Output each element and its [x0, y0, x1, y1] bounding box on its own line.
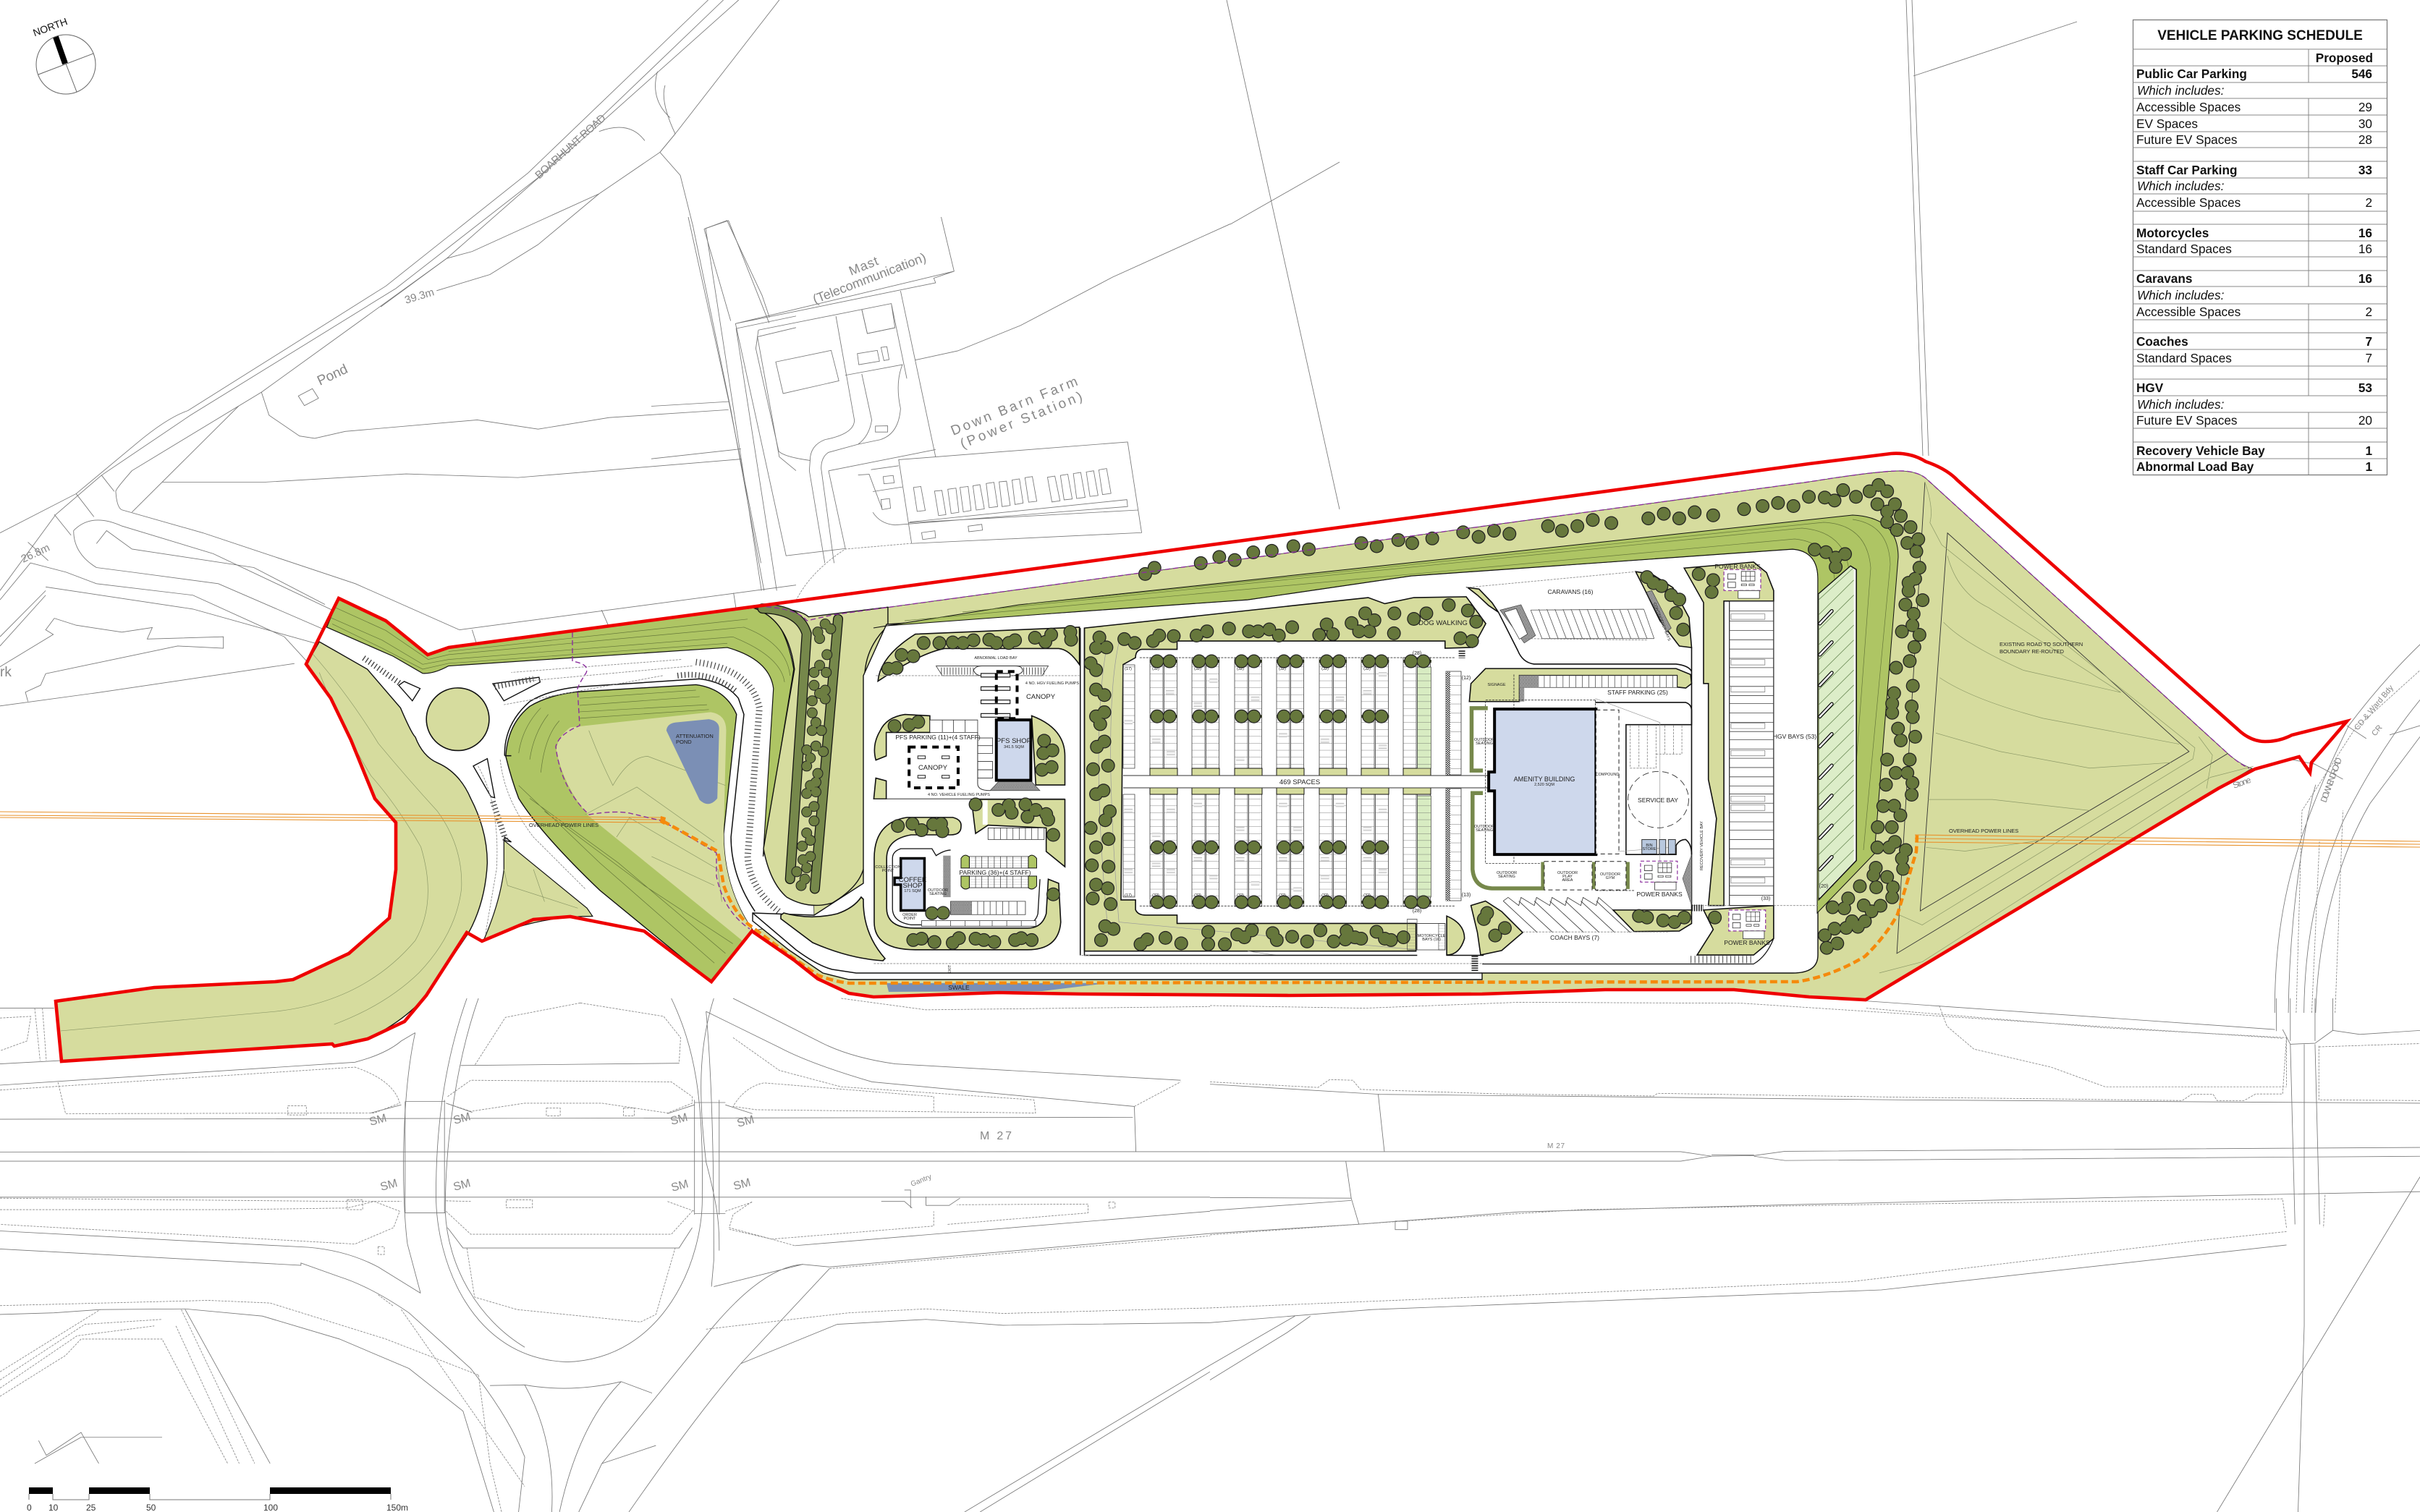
- plan text labels: HGV BAYS (53): [1773, 733, 1816, 740]
- field boundaries north and east: [1227, 0, 2077, 509]
- plan text labels: 4 NO. HGV FUELING PUMPS: [1025, 681, 1079, 686]
- table rows: Future EV Spaces: [2136, 413, 2237, 428]
- pond and power line labels: ATTENUATION: [676, 733, 714, 739]
- staff parking island: [1469, 668, 1691, 702]
- HGV canopy: [997, 671, 1017, 718]
- coffee inner block edge: [892, 849, 1040, 925]
- plan text labels: (32): [1152, 893, 1159, 898]
- plan text labels: (Telecommunication): [811, 250, 928, 307]
- panel: service area hardstanding: [753, 549, 1818, 980]
- M27 motorway and junction west: [0, 998, 1210, 1512]
- south road edge: [753, 913, 1482, 973]
- plan text labels: POINT: [882, 869, 894, 873]
- outdoor hedges: [1471, 708, 1628, 889]
- panel: car parking rows 469 spaces: [1123, 658, 1512, 906]
- plan text labels: RECOVERY VEHICLE BAY: [1700, 821, 1704, 870]
- plan text labels: AREA: [1562, 878, 1573, 883]
- plan text labels: (32): [1279, 893, 1286, 898]
- plan text labels: rk: [0, 665, 12, 680]
- table rows: EV Spaces: [2136, 116, 2198, 131]
- plan text labels: M 27: [1547, 1142, 1565, 1150]
- plan text labels: (32): [1152, 667, 1159, 671]
- island south of lobe: [781, 897, 885, 961]
- trees: north boundary belt: [1145, 497, 1809, 574]
- plan text labels: DOG WALKING: [1418, 619, 1468, 627]
- service bay circle: [1628, 771, 1688, 828]
- south landscape triangle: [483, 841, 593, 940]
- table rows: Abnormal Load Bay: [2136, 459, 2254, 474]
- table rows: Motorcycles: [2136, 226, 2209, 240]
- attenuation zone: [557, 712, 753, 940]
- south hatching: [1691, 956, 1753, 963]
- table rows: Standard Spaces: [2136, 242, 2232, 256]
- plan text labels: (28): [1413, 909, 1421, 914]
- accessible bays: [1446, 671, 1461, 901]
- plan text labels: 4 NO. VEHICLE FUELING PUMPS: [928, 793, 990, 797]
- north arrow: NORTH: [31, 15, 69, 38]
- outdoor gym: [1595, 862, 1626, 890]
- table rows: 7: [2365, 351, 2372, 365]
- table title: VEHICLE PARKING SCHEDULE: [2157, 28, 2363, 43]
- plan text labels: (20): [1819, 884, 1828, 889]
- caravan island: [1636, 572, 1691, 647]
- table rows: 16: [2358, 226, 2372, 240]
- plan text labels: DOWNEND ROAD: [2319, 756, 2344, 804]
- orange diverted cable route: [663, 821, 1917, 983]
- forecourt canopy: [909, 747, 958, 788]
- plan text labels: SM: [452, 1110, 472, 1127]
- east planted strip: [1684, 562, 1774, 906]
- plan text labels: (33): [1761, 896, 1770, 901]
- plan text labels: (13): [1462, 893, 1471, 898]
- plan text labels: SM: [732, 1176, 752, 1193]
- tree strip: [797, 624, 831, 885]
- plan text labels: (32): [1279, 667, 1286, 671]
- coffee shop building: [894, 859, 924, 910]
- tree zone around car park: [1084, 597, 1486, 951]
- overhead power lines east: [1915, 835, 2420, 847]
- plan text labels: 39.3m: [403, 286, 436, 307]
- plan text labels: SEATING: [1476, 828, 1493, 833]
- EV HGV diagonal bays: [1819, 566, 1856, 899]
- trees: amenity zone: [1484, 574, 1715, 935]
- upper and lower left column: [1123, 665, 1135, 768]
- plan text labels: CD & Ward Bdy: [2353, 684, 2395, 732]
- road edges: [504, 679, 755, 912]
- west landscape buffer: [56, 642, 487, 1061]
- trees: car park and fuel station: [889, 605, 1476, 944]
- plan text labels: 26.8m: [20, 542, 51, 566]
- plan text labels: SEATING: [929, 892, 947, 896]
- plan text labels: BIN: [1646, 844, 1653, 848]
- table rows: [2136, 51, 2373, 474]
- plan text labels: POND: [676, 739, 692, 745]
- EV charging bays: [1417, 667, 1431, 897]
- panel: site landscape base: [752, 471, 2252, 1000]
- table rows: 7: [2365, 334, 2372, 349]
- plan text labels: SIGNAGE: [1487, 683, 1506, 687]
- plan text labels: CONTINGENCY BAYS: [1652, 602, 1671, 642]
- plan text labels: SEATING: [1498, 875, 1515, 879]
- roundabout: [426, 688, 489, 750]
- table rows: 33: [2358, 163, 2372, 177]
- bin stores: [1642, 839, 1675, 854]
- plan text labels: COMPOUND: [1596, 773, 1619, 777]
- table rows: 1: [2365, 459, 2372, 474]
- lower island: [971, 799, 1065, 867]
- plan text labels: (12): [1462, 676, 1471, 681]
- plan text labels: EXISTING ROAD TO SOUTHERN: [2000, 641, 2083, 647]
- plan text labels: POWER BANKS: [1636, 891, 1683, 898]
- red site boundary: [56, 454, 2347, 1061]
- north-west slope band: [326, 598, 794, 857]
- table rows: Accessible Spaces: [2136, 195, 2241, 210]
- plan text labels: (32): [1363, 667, 1371, 671]
- shop forecourt hatching: [990, 782, 1040, 791]
- plan text labels: Pond: [315, 362, 350, 389]
- plan text labels: GYM: [1606, 876, 1615, 880]
- plan text labels: (32): [1321, 893, 1329, 898]
- motorcycle bays: [1408, 919, 1445, 950]
- plan text labels: PLAY: [1562, 875, 1573, 879]
- panel: car park and fuel station islands: [873, 597, 1486, 964]
- bottom bays: [921, 828, 1044, 926]
- plan text labels: OUTDOOR: [1557, 871, 1578, 875]
- plan text labels: PFS PARKING (11)+(4 STAFF): [895, 734, 981, 741]
- parked cars: [1125, 658, 1455, 906]
- plan text labels: COACH BAYS (7): [1550, 934, 1599, 941]
- table rows: Standard Spaces: [2136, 351, 2232, 365]
- PFS bays: [930, 720, 993, 778]
- plan text labels: SM: [452, 1177, 472, 1194]
- plan text labels: PARKING (36)+(4 STAFF): [959, 869, 1031, 876]
- outdoor play area: [1544, 862, 1592, 890]
- table rows: Which includes:: [2137, 288, 2225, 302]
- plan text labels: [0, 112, 2395, 1194]
- purple limit of works: [556, 471, 2249, 929]
- compound: [1596, 710, 1619, 854]
- plan text labels: (32): [1194, 893, 1201, 898]
- plan text labels: CR: [2370, 723, 2385, 738]
- plan text labels: OVERHEAD POWER LINES: [1949, 828, 2018, 834]
- right of shop island: [1032, 715, 1065, 785]
- orange route arrow: [660, 816, 666, 825]
- panel: north slope band: [873, 515, 1898, 913]
- panel: eastern landscape contours: [1879, 482, 2254, 973]
- plan text labels: SHOP: [903, 882, 922, 890]
- hedgerow strips: [762, 608, 838, 889]
- north arrow: [31, 15, 96, 94]
- central landscape lobe: [755, 607, 888, 905]
- table rows: Which includes:: [2137, 179, 2225, 193]
- coffee outdoor hatch: [943, 856, 951, 897]
- HGV bays: [1730, 601, 1774, 906]
- plan text labels: POWER BANKS: [1724, 939, 1770, 946]
- staff parking bays: [1520, 676, 1677, 702]
- table rows: 20: [2358, 413, 2372, 428]
- plan text labels: (32): [1194, 667, 1201, 671]
- table rows: Accessible Spaces: [2136, 100, 2241, 114]
- plan text labels: (32): [1237, 667, 1244, 671]
- power banks: [1641, 569, 1766, 939]
- table rows: 28: [2358, 132, 2372, 147]
- service yard: [1595, 702, 1691, 854]
- plan text labels: Gantry: [910, 1173, 933, 1189]
- table rows: Public Car Parking: [2136, 67, 2247, 81]
- road hatching: [696, 662, 781, 913]
- table rows: 30: [2358, 116, 2372, 131]
- PFS labels: ABNORMAL LOAD BAY: [974, 656, 1018, 661]
- amenity building: [1489, 709, 1596, 854]
- car park labels: 469 SPACES: [1279, 778, 1320, 786]
- table rows: 16: [2358, 242, 2372, 256]
- plan text labels: BAYS (16): [1422, 938, 1441, 942]
- lower east planted strip: [1697, 906, 1774, 955]
- table rows: 1: [2365, 443, 2372, 458]
- plan text labels: SM: [368, 1112, 388, 1129]
- plan text labels: CANOPY: [918, 764, 948, 772]
- table rows: 2: [2365, 195, 2372, 210]
- plan text labels: (17): [1125, 893, 1132, 898]
- scale bar: [27, 1487, 408, 1512]
- table rows: Accessible Spaces: [2136, 305, 2241, 319]
- crossing markings: [1462, 650, 1704, 972]
- trees: eastern belt: [1815, 485, 1923, 948]
- plan text labels: Stone: [2231, 775, 2253, 791]
- traffic islands: [399, 677, 540, 842]
- map base labels: Mast: [847, 253, 880, 279]
- plan text labels: 2,520 SQM: [1534, 783, 1554, 787]
- PFS left island: [874, 715, 930, 760]
- plan text labels: BOUNDARY RE-ROUTED: [2000, 648, 2064, 655]
- plan text labels: (32): [1321, 667, 1329, 671]
- dual road dividers: [1080, 628, 1484, 955]
- inner slope band: [506, 684, 753, 982]
- table rows: HGV: [2136, 381, 2164, 395]
- plan text labels: SM: [736, 1113, 756, 1130]
- coffee parking block: [961, 855, 1036, 889]
- plan text labels: 171 SQM: [904, 889, 921, 893]
- plan text labels: SERVICE BAY: [1638, 797, 1678, 804]
- plan text labels: EXIT: [948, 964, 952, 974]
- table rows: Staff Car Parking: [2136, 163, 2237, 177]
- plan text labels: M 27: [980, 1130, 1012, 1142]
- plan text labels: PFS SHOP: [997, 737, 1031, 745]
- dashed amenity zone: [1486, 674, 1634, 891]
- plan text labels: (32): [1363, 893, 1371, 898]
- overhead power lines west: [0, 812, 663, 823]
- table rows: Proposed: [2316, 51, 2373, 65]
- plan text labels: (Power Station): [958, 389, 1085, 452]
- plan text labels: SM: [669, 1111, 689, 1128]
- amenity labels: CARAVANS (16): [1548, 588, 1594, 595]
- coach island: [1471, 901, 1523, 955]
- plan text labels: STAFF PARKING (25): [1607, 689, 1668, 696]
- table rows: 53: [2358, 381, 2372, 395]
- masts and power station buildings: [651, 217, 1230, 563]
- plan text labels: POINT: [904, 917, 916, 921]
- plan text labels: CANOPY: [1026, 693, 1056, 701]
- plan text labels: 341.5 SQM: [1004, 745, 1024, 749]
- vehicle pumps: [918, 756, 949, 778]
- plan text labels: MOTORCYCLE: [1418, 934, 1446, 938]
- plan text labels: OUTDOOR: [1474, 825, 1494, 829]
- plan text labels: (17): [1125, 667, 1132, 671]
- plan text labels: AMENITY BUILDING: [1514, 776, 1575, 783]
- table rows: 16: [2358, 271, 2372, 286]
- plan text labels: ORDER: [902, 913, 917, 917]
- plan text labels: COLLECTION: [875, 865, 901, 870]
- plan text labels: OVERHEAD POWER LINES: [529, 822, 598, 828]
- double rows: [1150, 658, 1431, 906]
- plan text labels: (28): [1413, 651, 1421, 656]
- plan text labels: OUTDOOR: [1600, 872, 1620, 877]
- table rows: 546: [2351, 67, 2372, 81]
- plan text labels: Down Barn Farm: [949, 374, 1080, 439]
- plan text labels: POWER BANKS: [1714, 563, 1761, 570]
- north-west roads: [0, 0, 796, 706]
- table rows: Coaches: [2136, 334, 2188, 349]
- plan text labels: SWALE: [948, 984, 970, 991]
- table rows: Recovery Vehicle Bay: [2136, 443, 2265, 458]
- PFS shop building: [997, 720, 1031, 781]
- top PFS island: [878, 627, 1080, 681]
- plan text labels: COFFEE: [899, 876, 926, 884]
- plan text labels: OUTDOOR: [928, 888, 948, 893]
- table rows: Caravans: [2136, 271, 2192, 286]
- plan text labels: OUTDOOR: [1497, 871, 1517, 875]
- table rows: Future EV Spaces: [2136, 132, 2237, 147]
- plan text labels: BOARHUNT ROAD: [533, 112, 609, 182]
- table rows: 2: [2365, 305, 2372, 319]
- panel: western landscaping and slopes: [56, 598, 888, 1061]
- plan text labels: SM: [379, 1177, 399, 1194]
- plan text labels: OUTDOOR: [1474, 738, 1494, 742]
- coffee shop ring: [874, 817, 1061, 950]
- swale: [887, 983, 1107, 992]
- HGV fuel pumps: [981, 674, 1010, 717]
- coach bays: [1503, 897, 1670, 933]
- attenuation pond: [667, 719, 719, 804]
- plan text labels: SEATING: [1476, 742, 1493, 746]
- table rows: 29: [2358, 100, 2372, 114]
- plan text labels: (32): [1237, 893, 1244, 898]
- caravan bays: [1500, 590, 1671, 643]
- M27 motorway east: [1210, 998, 2420, 1512]
- downend road curves: [2275, 645, 2420, 1013]
- plan text labels: STORE: [1643, 847, 1657, 851]
- table rows: Which includes:: [2137, 397, 2225, 412]
- table rows: Which includes:: [2137, 83, 2225, 98]
- vehicle parking schedule table: [2133, 20, 2387, 475]
- panel: amenity and HGV zone: [1408, 562, 1856, 972]
- abnormal load bay: [936, 666, 1049, 676]
- plan text labels: SM: [670, 1178, 690, 1194]
